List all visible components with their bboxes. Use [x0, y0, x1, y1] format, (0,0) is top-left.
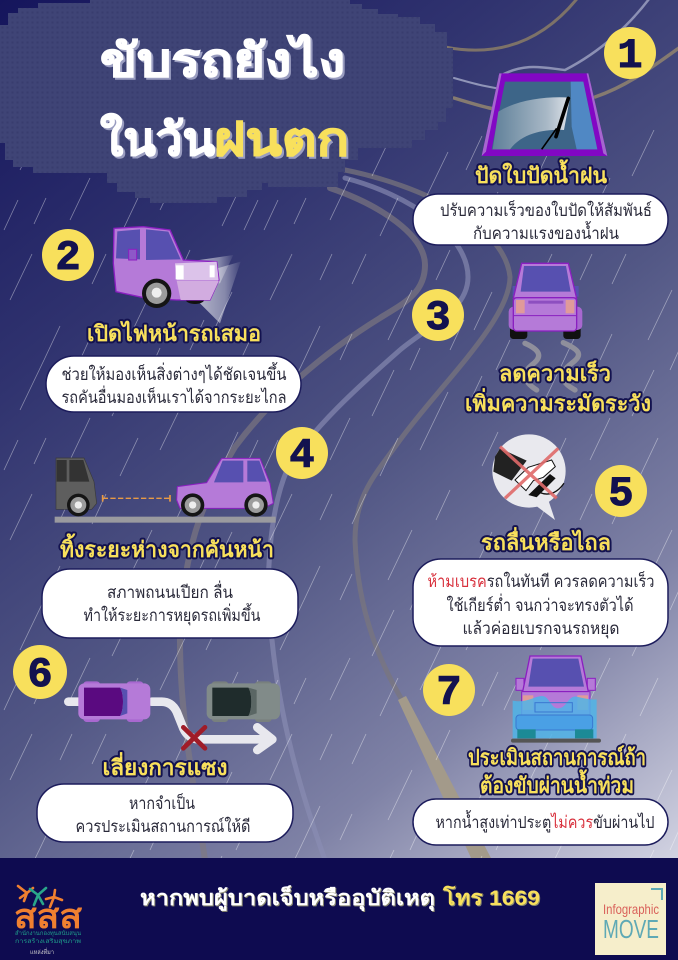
logo: Infographic Move — [595, 883, 666, 955]
text pill: หากจำเป็น — [129, 792, 195, 813]
number badge 1: 1 — [617, 32, 643, 80]
icon: overtaking arrow and cars — [68, 681, 280, 750]
text pill — [413, 194, 668, 245]
text pill: ใช้เกียร์ต่ำ จนกว่าจะทรงตัวได้ — [446, 593, 634, 615]
heading: ต้องขับผ่านน้ำท่วม — [480, 769, 634, 798]
title: ขับรถยังไง — [100, 34, 345, 86]
cloud title backdrop — [0, 0, 453, 203]
number badge 2: 2 — [55, 234, 81, 282]
number badge 5 — [595, 465, 647, 518]
text pill — [37, 784, 293, 842]
number badge 2 — [42, 229, 94, 282]
hotline message — [140, 884, 540, 912]
panel: step 4 following distance — [42, 427, 328, 638]
number badge 4: 4 — [289, 432, 315, 480]
text pill: กับความแรงของน้ำฝน — [473, 221, 619, 243]
heading: รถลื่นหรือไถล — [481, 526, 611, 555]
number badge 1 — [604, 27, 656, 80]
heading: ปัดใบปัดน้ำฝน — [475, 159, 607, 188]
title: ในวัน — [100, 112, 216, 165]
panel: step 1 wipers — [413, 27, 668, 245]
text pill: รถคันอื่นมองเห็นเราได้จากระยะไกล — [62, 385, 286, 407]
heading: เปิดไฟหน้ารถเสมอ — [87, 320, 261, 346]
text pill: แล้วค่อยเบรกจนรถหยุด — [462, 619, 620, 639]
logo: ThaiHealth — [14, 886, 82, 956]
panel: step 3 slow down — [412, 263, 651, 416]
icon: car in flood water — [511, 656, 601, 743]
logo: ThaiHealth: สสส — [14, 898, 82, 936]
text pill — [46, 356, 301, 412]
icon: no braking speech bubble — [492, 434, 566, 520]
text pill: ทำให้ระยะการหยุดรถเพิ่มขึ้น — [84, 603, 261, 626]
heading: ทิ้งระยะห่างจากคันหน้า — [60, 533, 274, 562]
text pill: ห้ามเบรครถในทันที ควรลดความเร็ว — [428, 570, 654, 591]
number badge 3: 3 — [425, 294, 451, 342]
logo: ThaiHealth: แหล่งที่มา — [30, 948, 54, 956]
icon: windshield — [482, 73, 607, 156]
heading: เพิ่มความระมัดระวัง — [465, 387, 651, 416]
rain — [0, 130, 678, 860]
title: ฝนตก — [214, 113, 349, 165]
heading — [465, 359, 651, 416]
number badge 6 — [13, 645, 67, 699]
panel: step 5 skidding — [413, 434, 668, 646]
icon: car with headlights — [113, 227, 241, 323]
heading: ประเมินสถานการณ์ถ้า — [468, 745, 646, 770]
number badge 3 — [412, 289, 464, 342]
footer band — [0, 858, 678, 960]
text pill — [42, 569, 298, 638]
text pill: ปรับความเร็วของใบปัดให้สัมพันธ์ — [440, 199, 652, 220]
text pill: หากน้ำสูงเท่าประตูไม่ควรขับผ่านไป — [436, 810, 654, 833]
text pill: ควรประเมินสถานการณ์ให้ดี — [76, 816, 250, 836]
text pill — [413, 799, 668, 845]
hotline message: หากพบผู้บาดเจ็บหรืออุบัติเหตุ — [140, 884, 435, 912]
panel: step 7 flood — [413, 656, 668, 845]
hotline message: โทร 1669 — [442, 885, 540, 910]
roads — [180, 0, 678, 860]
text pill — [413, 559, 668, 646]
heading — [468, 745, 646, 798]
logo: ThaiHealth: การสร้างเสริมสุขภาพ — [15, 938, 81, 945]
text pill: ช่วยให้มองเห็นสิ่งต่างๆได้ชัดเจนขึ้น — [62, 362, 287, 384]
number badge 7: 7 — [436, 669, 462, 717]
icon: two cars with gap — [55, 458, 276, 523]
logo: ThaiHealth: สำนักงานกองทุนสนับสนุน — [15, 930, 81, 937]
logo: Infographic Move: MOVE — [603, 914, 659, 944]
panel: step 6 avoid overtaking — [13, 645, 293, 842]
heading: ลดความเร็ว — [499, 359, 611, 386]
logo: Infographic Move: Infographic — [603, 901, 659, 917]
number badge 5: 5 — [608, 470, 634, 518]
panel: step 2 headlights — [42, 227, 301, 412]
heading: เลี่ยงการแซง — [102, 751, 228, 780]
number badge 6: 6 — [27, 651, 53, 699]
number badge 4 — [276, 427, 328, 480]
icon: car rear with skid marks — [509, 263, 582, 390]
number badge 7 — [423, 664, 475, 717]
title — [100, 34, 349, 165]
text pill: สภาพถนนเปียก ลื่น — [107, 580, 233, 602]
